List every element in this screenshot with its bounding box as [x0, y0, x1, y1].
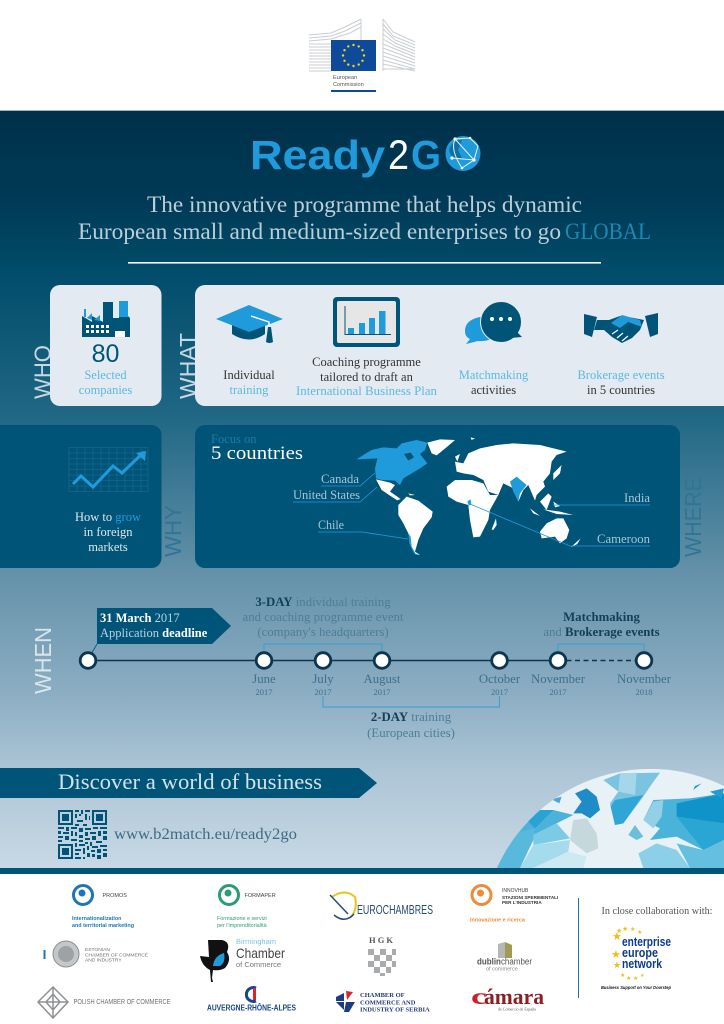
- logo: Enterprise Europe Network: enterprise: [622, 934, 671, 949]
- text: brokerage events: in 5 countries: [587, 383, 655, 397]
- illustration: low-poly globe: [497, 769, 724, 868]
- logo: Polish Chamber: POLISH CHAMBER OF COMMERCE: [74, 999, 171, 1006]
- title: Ready2GO: Ready: [250, 132, 385, 178]
- timeline year labels: 2017: [314, 687, 332, 697]
- callout: application deadline: [90, 608, 231, 656]
- text: how to grow: in foreign: [84, 525, 133, 539]
- logo: HGK: H G K: [369, 935, 393, 945]
- timeline month labels: June: [252, 672, 276, 686]
- logo: PROMOS: PROMOS: [102, 893, 127, 899]
- timeline year labels: 2017: [550, 687, 566, 697]
- text: matchmaking activities: activities: [471, 383, 516, 397]
- map callout: India: [553, 491, 650, 505]
- panel: what: [195, 285, 724, 406]
- India: [510, 477, 527, 502]
- logo: Auvergne-Rhone-Alpes CCI: AUVERGNE-RHÔNE-ALPES: [207, 1004, 297, 1012]
- header rule: [0, 110, 724, 111]
- logo: Enterprise Europe Network: ★: [622, 925, 628, 933]
- logo: Chamber of Commerce Serbia: COMMERCE AND: [360, 1000, 416, 1006]
- footer background: [0, 874, 724, 1024]
- chart: growth arrow on grid: [69, 447, 148, 492]
- logo: FORMAPER: FORMAPER: [244, 893, 276, 899]
- callout: application deadline: 31 March 2017: [100, 611, 180, 625]
- timeline year labels: 2017: [256, 687, 272, 697]
- text: focus on: Focus on: [211, 432, 257, 446]
- logo: Enterprise Europe Network: europe: [622, 945, 658, 960]
- logo: Camara: c: [471, 984, 487, 1009]
- subtitle: European small and medium-sized enterprises to go: [78, 219, 561, 244]
- logo: Birmingham Chamber: [200, 937, 285, 982]
- Canada and United States: [357, 440, 427, 485]
- logo blue bar: [331, 90, 376, 92]
- logo: Dublin Chamber: [477, 942, 532, 972]
- panel: who: [50, 285, 162, 406]
- logo: Enterprise Europe Network: ★: [633, 975, 638, 982]
- logo: Dublin Chamber: dublinchamber: [477, 956, 532, 966]
- logo: FORMAPER: [217, 886, 276, 929]
- icon: handshake: [584, 313, 658, 343]
- logo: Enterprise Europe Network: ★: [616, 927, 622, 935]
- logo: PROMOS: [72, 886, 134, 929]
- logo: Chamber of Commerce Serbia: INDUSTRY OF SERBIA: [360, 1006, 430, 1014]
- section label: WHY: WHY: [160, 505, 186, 557]
- Chile: [408, 533, 416, 554]
- callout: application deadline: Application deadline: [100, 626, 208, 640]
- logo: Chamber of Commerce Serbia: CHAMBER OF: [360, 992, 405, 999]
- Greenland: [427, 439, 455, 455]
- section label: WHO: WHO: [30, 345, 56, 399]
- text: website url: www.b2match.eu/ready2go: [114, 826, 297, 843]
- map callout: United States: United States: [293, 488, 360, 502]
- timeline year labels: [256, 687, 652, 697]
- text: individual training: [223, 368, 275, 397]
- text: matchmaking and brokerage: and Brokerage events: [543, 625, 660, 639]
- text: individual training: Individual: [223, 368, 275, 382]
- panel: why: [0, 425, 162, 568]
- logo: Camara: ámara: [484, 984, 544, 1009]
- icon: EU flag: [331, 40, 376, 71]
- text: matchmaking and brokerage: Matchmaking: [563, 610, 640, 624]
- icon: network globe: [446, 136, 480, 171]
- logo text: European: [333, 75, 357, 81]
- logo: Chamber of Commerce Serbia: [336, 991, 430, 1014]
- banner: discover a world of business: Discover a world of business: [58, 769, 322, 794]
- text: selected companies: companies: [79, 383, 132, 397]
- logo: EUROCHAMBRES: [330, 892, 433, 919]
- chart: world map: [357, 437, 581, 555]
- timeline month labels: [252, 672, 672, 686]
- footer bar: [0, 868, 724, 874]
- timeline month labels: August: [364, 672, 401, 686]
- timeline brackets: [264, 644, 644, 707]
- logo: Estonian Chamber: ESTONIAN: [85, 947, 110, 953]
- icon: QR code: [58, 810, 107, 859]
- icon: graduation cap: [216, 305, 283, 343]
- South America: [398, 497, 433, 555]
- text: brokerage events: Brokerage events: [577, 368, 665, 382]
- text: how to grow: [75, 510, 141, 554]
- Africa: [447, 480, 498, 537]
- text: how to grow: markets: [88, 540, 128, 554]
- logo: European Commission: [309, 19, 415, 92]
- map callout: Cameroon: [470, 504, 651, 546]
- section label: WHERE: WHERE: [680, 477, 706, 557]
- timeline dashed axis: [558, 660, 644, 662]
- logo text: [333, 75, 364, 88]
- map callout: Chile: [318, 518, 408, 539]
- logo: Estonian Chamber: AND INDUSTRY: [85, 958, 122, 964]
- text: coaching programme: Coaching programme: [312, 355, 421, 369]
- text: individual training: training: [230, 383, 269, 397]
- text: brokerage events: [577, 368, 665, 397]
- logo: Enterprise Europe Network: ★: [620, 972, 625, 979]
- icon: factory: [82, 301, 130, 337]
- logo: Enterprise Europe Network: ★: [613, 960, 621, 970]
- subtitle: [78, 192, 651, 244]
- logo: Estonian Chamber: CHAMBER OF COMMERCE: [85, 952, 149, 958]
- logo: Enterprise Europe Network: ★: [640, 973, 645, 979]
- timeline: [80, 595, 672, 740]
- text: coaching programme: [296, 355, 438, 398]
- text: 3-day training: 3-DAY individual training: [255, 595, 391, 609]
- logo text: Commission: [333, 82, 364, 88]
- Central America: [376, 479, 401, 500]
- logo: INNOVHUB: INNOVHUB: [502, 888, 529, 894]
- white header background: [0, 0, 724, 110]
- logo: Enterprise Europe Network: [601, 925, 671, 991]
- banner: discover a world of business: [0, 768, 377, 798]
- Australia: [540, 518, 569, 543]
- title: Ready2GO: G: [411, 132, 441, 178]
- text: 2-day training: [367, 710, 455, 740]
- stat: 80 companies: 80: [92, 340, 119, 368]
- text: coaching programme: International Business Plan: [296, 384, 438, 398]
- Cameroon: [467, 499, 471, 505]
- title: Ready2GO: 2: [388, 131, 409, 178]
- timeline month labels: July: [312, 672, 334, 686]
- logo: Enterprise Europe Network: Business Support on Your Doorstep: [601, 985, 671, 991]
- logo: Enterprise Europe Network: ★: [626, 975, 631, 982]
- logo: Enterprise Europe Network: network: [622, 956, 663, 971]
- logo: Enterprise Europe Network: ★: [612, 931, 622, 943]
- logo: INNOVHUB: [470, 886, 558, 924]
- text: how to grow: How to grow: [75, 510, 141, 524]
- text: 2-day training: 2-DAY training: [371, 710, 452, 724]
- timeline axis: [88, 660, 558, 662]
- logo: PROMOS: and territorial marketing: [72, 923, 134, 929]
- subtitle: The innovative programme that helps dynamic: [147, 192, 582, 217]
- logo: Enterprise Europe Network: ★: [611, 949, 621, 961]
- map callout: Canada: [321, 472, 375, 486]
- logo: FORMAPER: Formazione e servizi: [217, 916, 267, 922]
- Eurasia: [455, 443, 567, 502]
- logo: PROMOS: Internationalization: [72, 916, 121, 922]
- logo: EUROCHAMBRES: EUROCHAMBRES: [357, 903, 433, 917]
- map callout: Canada: Canada: [321, 472, 359, 486]
- logo: Enterprise Europe Network: ★: [637, 929, 642, 936]
- Hudson Bay: [404, 453, 414, 461]
- timeline year labels: 2017: [374, 687, 390, 697]
- map callout: Chile: Chile: [318, 518, 344, 532]
- logo: INNOVHUB: PER L'INDUSTRIA: [502, 900, 542, 905]
- logo: Birmingham Chamber: Chamber: [236, 945, 285, 961]
- icon: Berlaymont building right wing: [383, 19, 415, 71]
- text: matchmaking activities: [459, 368, 529, 397]
- timeline year labels: 2017: [491, 687, 508, 697]
- section label: WHEN: WHEN: [30, 627, 56, 694]
- logo: INNOVHUB: STAZIONI SPERIMENTALI: [502, 895, 558, 900]
- text: 3-day training: and coaching programme event: [243, 610, 404, 624]
- logo: Enterprise Europe Network: ★: [630, 926, 635, 933]
- section label: WHAT: WHAT: [175, 333, 201, 399]
- text: selected companies: [79, 368, 132, 397]
- timeline month labels: October: [479, 672, 521, 686]
- page background gradient: [0, 110, 724, 870]
- timeline month labels: November: [617, 672, 672, 686]
- subtitle: GLOBAL: [565, 219, 651, 244]
- logo: Auvergne-Rhone-Alpes CCI: [207, 988, 297, 1012]
- title: Ready2GO: [250, 131, 480, 178]
- logo: Polish Chamber: [38, 987, 171, 1018]
- logo: Dublin Chamber: of commerce: [486, 966, 518, 972]
- timeline nodes: [80, 653, 652, 668]
- icon: chart board: [333, 297, 400, 347]
- footer divider: [578, 898, 579, 998]
- logo: FORMAPER: per l'imprenditorialità: [217, 923, 267, 929]
- text: coaching programme: tailored to draft an: [320, 370, 414, 384]
- text: selected companies: Selected: [84, 368, 127, 382]
- icon: Berlaymont building left wing: [309, 19, 361, 71]
- timeline month labels: November: [531, 672, 586, 686]
- logo: Camara: de Comercio de España: [498, 1006, 536, 1012]
- islands: [408, 437, 581, 547]
- logo: Estonian Chamber: [44, 941, 149, 967]
- timeline year labels: 2018: [636, 687, 652, 697]
- map callout: India: India: [624, 491, 650, 505]
- text: 2-day training: (European cities): [367, 726, 455, 740]
- icon: chat bubbles: [465, 302, 522, 344]
- text: matchmaking activities: Matchmaking: [459, 368, 529, 382]
- logo: HGK: [368, 935, 396, 976]
- map callout: Cameroon: Cameroon: [597, 532, 651, 546]
- panel: where: [195, 425, 680, 568]
- text: 3-day training: [243, 595, 404, 639]
- logo: Birmingham Chamber: of Commerce: [236, 960, 281, 969]
- text: matchmaking and brokerage: [543, 610, 660, 639]
- text: 3-day training: (company's headquarters): [257, 625, 389, 639]
- heading: 5 countries: 5 countries: [211, 444, 303, 464]
- logo: Birmingham Chamber: Birmingham: [236, 937, 276, 946]
- title divider: [128, 262, 601, 264]
- logo: INNOVHUB: Innovazione e ricerca: [470, 918, 526, 924]
- text: in close collaboration with: In close collaboration with:: [602, 906, 713, 917]
